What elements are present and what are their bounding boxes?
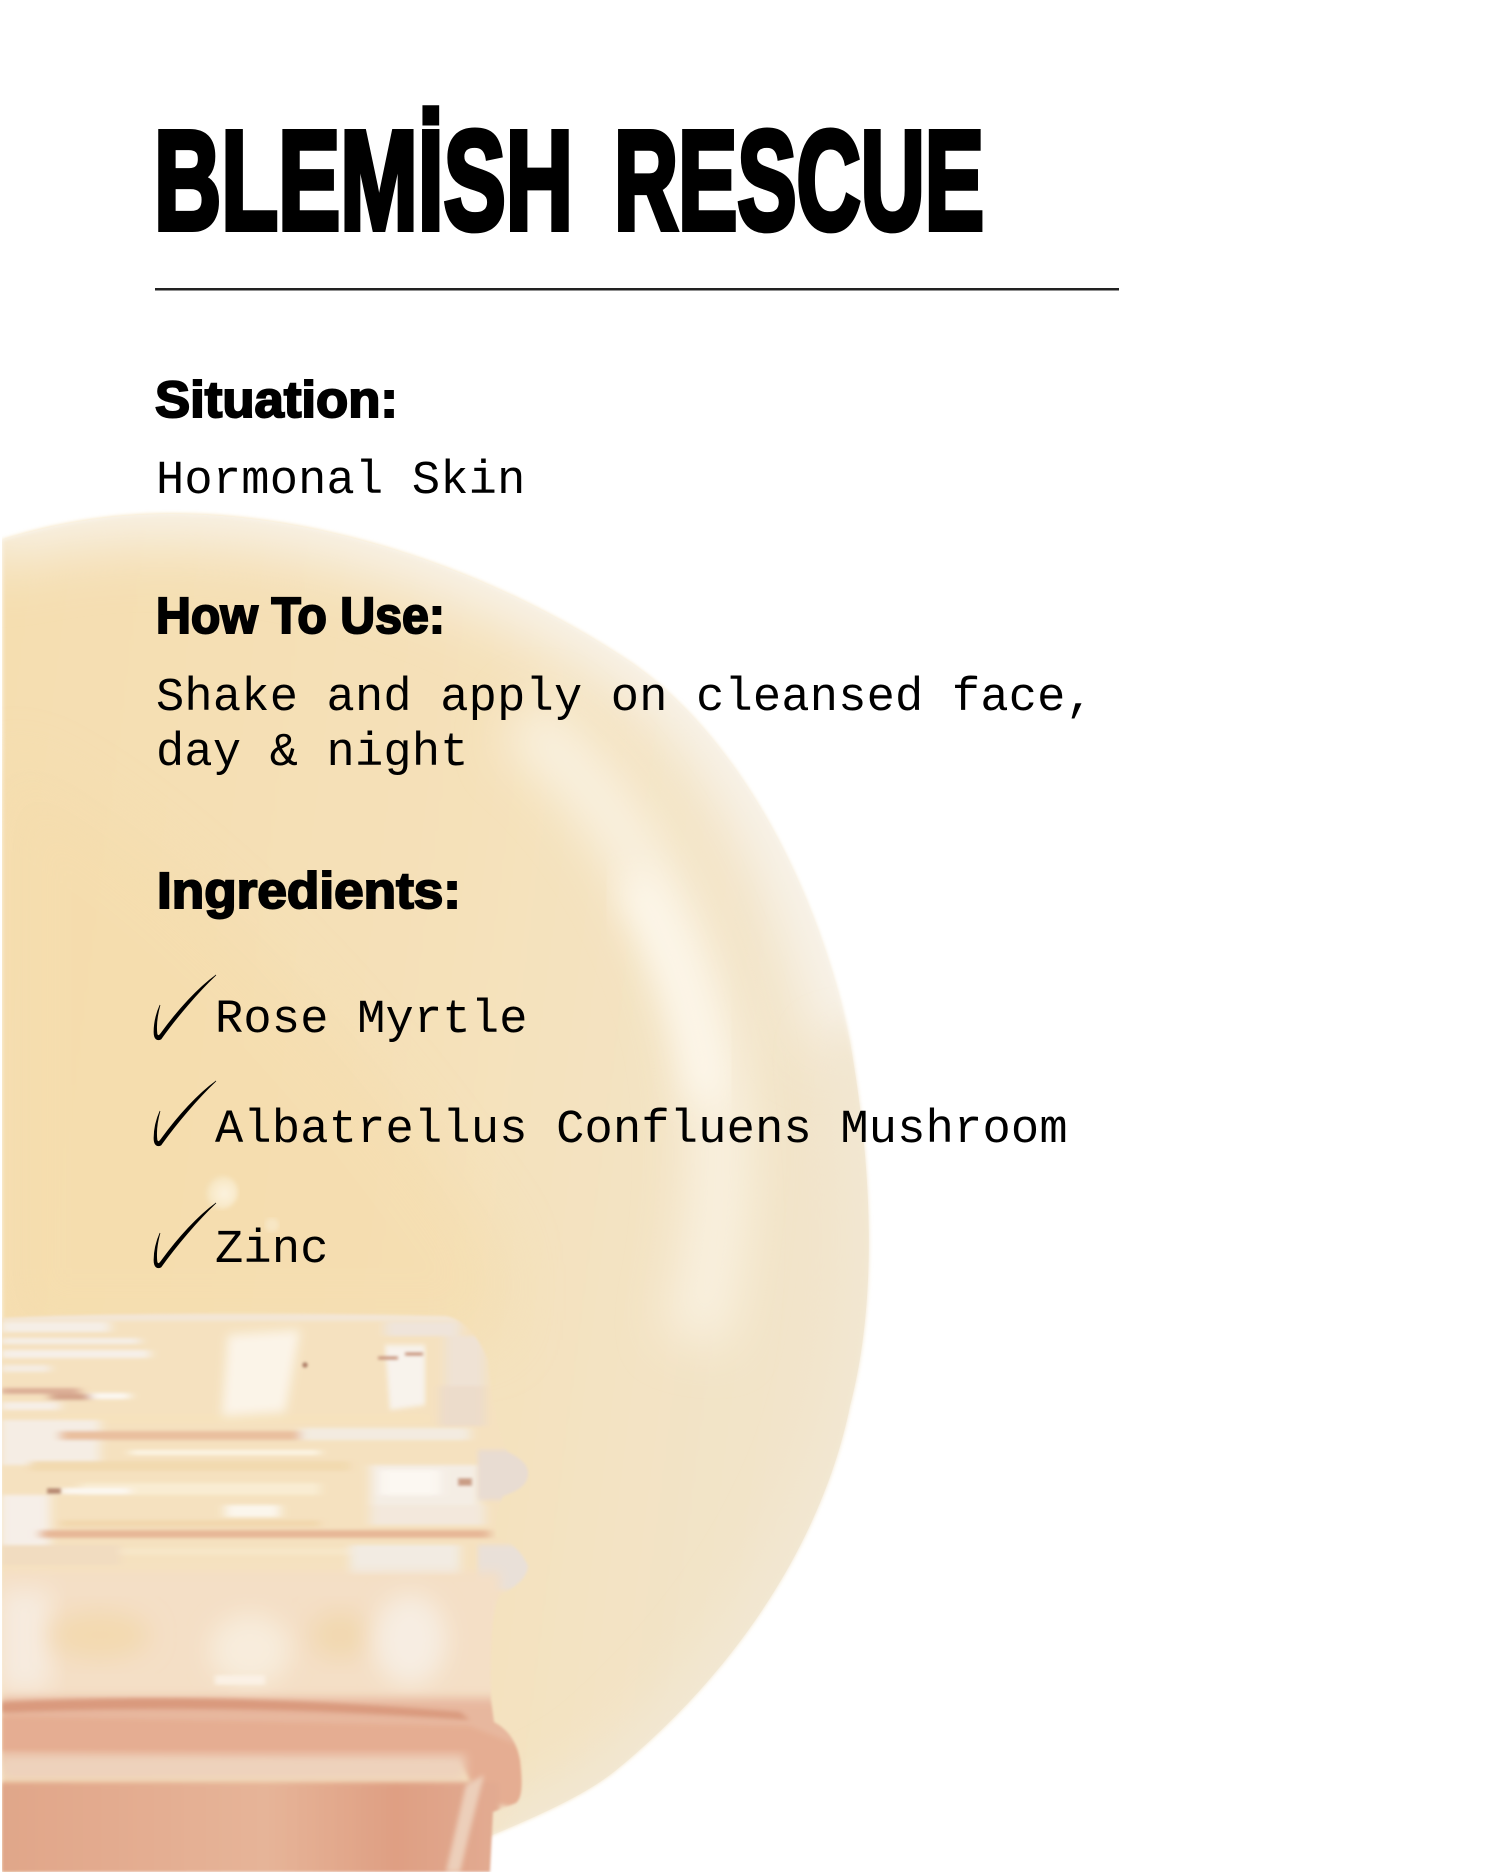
heading: situation: Situation:	[155, 371, 398, 428]
pink band	[0, 1698, 530, 1764]
text: situation value: Hormonal Skin	[156, 455, 526, 508]
heading: ingredients: Ingredients:	[157, 862, 461, 919]
ingredient: rose myrtle: Rose Myrtle	[215, 994, 528, 1047]
heading: how to use: How To Use:	[156, 587, 445, 644]
ingredient: albatrellus confluens mushroom	[154, 1081, 1068, 1157]
thread glass	[0, 1420, 490, 1575]
text: how to use instructions: day & night	[156, 727, 469, 780]
serum blob	[0, 495, 877, 1872]
left white edge	[0, 0, 2, 1872]
lower body	[0, 1782, 500, 1872]
text: how to use instructions: Shake and apply on cleansed face,	[156, 672, 1094, 725]
ingredient: rose myrtle	[154, 975, 528, 1047]
title rule	[155, 288, 1119, 290]
title: RESCUE	[614, 101, 984, 259]
icon: check mark	[154, 1203, 216, 1268]
ingredient: zinc: Zinc	[215, 1224, 329, 1277]
text: how to use instructions	[156, 672, 1094, 780]
droplets	[204, 1175, 279, 1232]
top lip glass	[0, 1314, 500, 1426]
ingredient: albatrellus confluens mushroom: Albatrellus Confluens Mushroom	[215, 1104, 1068, 1157]
ingredient: zinc	[154, 1203, 329, 1277]
collar	[0, 1572, 500, 1712]
title: BLEMİSH	[154, 101, 573, 259]
bottle neck	[0, 1300, 540, 1872]
pale ring	[0, 1755, 465, 1781]
icon: check mark	[154, 975, 216, 1040]
icon: check mark	[154, 1081, 216, 1146]
